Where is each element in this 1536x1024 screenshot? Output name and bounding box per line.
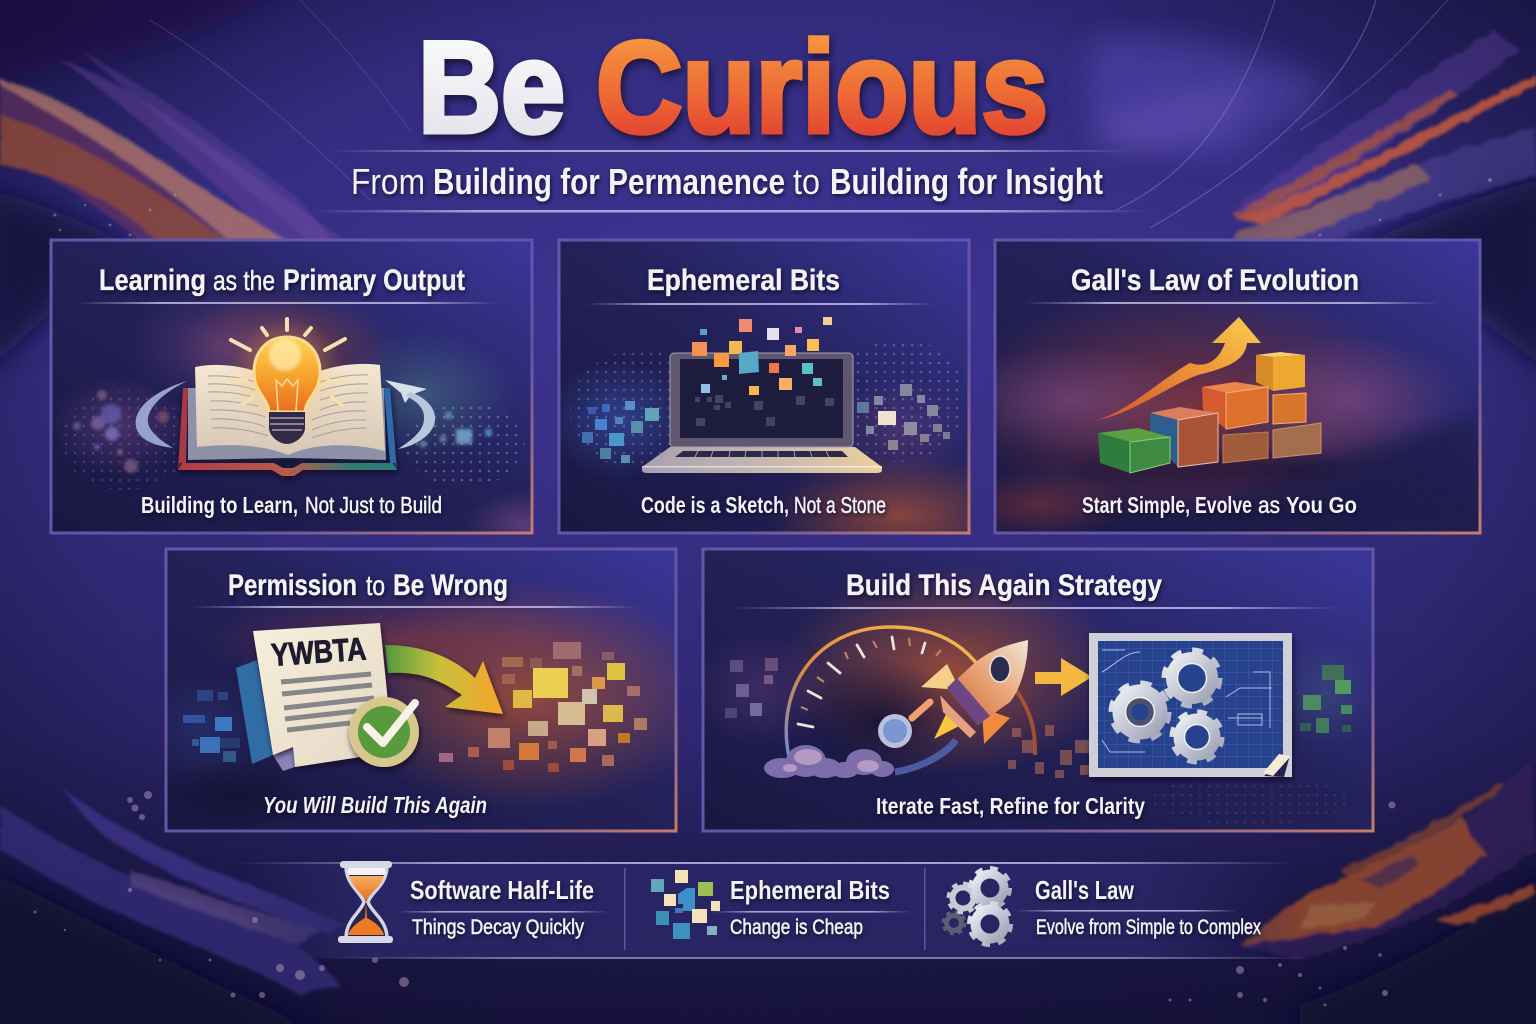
caption: You Go — [1286, 492, 1357, 518]
footer strip — [235, 861, 1320, 959]
icon: speedometer with rocket — [764, 627, 1035, 778]
panel heading — [228, 569, 508, 602]
legend: Software Half-Life: Software Half-Life — [410, 875, 594, 905]
panel heading: Learning — [99, 264, 206, 297]
icon: blueprint with gears — [1089, 633, 1292, 777]
subtitle: From — [351, 161, 425, 202]
panel heading: as the — [213, 265, 275, 296]
subtitle — [310, 150, 1150, 212]
legend: Software Half-Life — [397, 875, 608, 939]
panel: Gall's Law of Evolution — [950, 240, 1480, 540]
title: Be Curious: Be — [418, 14, 565, 160]
icon: growing blocks with arrow — [1075, 317, 1335, 482]
panel: Ephemeral Bits — [558, 238, 970, 534]
title: Be Curious — [418, 14, 1048, 160]
caption: Building to Learn, — [141, 492, 298, 518]
panel heading: to — [366, 570, 385, 601]
legend: Gall's Law: Evolve from Simple to Complex — [1036, 916, 1261, 939]
caption — [141, 492, 442, 518]
title: Be Curious: Curious — [596, 14, 1048, 160]
legend: Ephemeral Bits: Ephemeral Bits — [730, 875, 890, 905]
icon: gears — [944, 869, 1010, 944]
icon: side bits — [725, 658, 1352, 778]
icon: laptop with dissolving squares — [582, 317, 950, 473]
caption: Code is a Sketch, — [641, 492, 789, 518]
panel: Build This Again Strategy — [690, 549, 1375, 831]
caption: Not a Stone — [794, 492, 886, 518]
subtitle: Building for Permanence — [433, 161, 785, 202]
panel: Learning as the Primary Output — [50, 238, 534, 534]
icon: hourglass — [338, 861, 393, 943]
icon: YWBTA document with check badge: YWBTA — [270, 630, 367, 673]
panel heading: Build This Again Strategy — [846, 569, 1162, 602]
legend: Gall's Law: Gall's Law — [1035, 875, 1135, 905]
icon: book, bulb and cycle arrows — [136, 317, 435, 476]
icon: transformed bits — [439, 642, 647, 772]
legend: Ephemeral Bits: Change is Cheap — [730, 916, 863, 939]
legend: Ephemeral Bits — [712, 875, 911, 939]
panel heading: Primary Output — [283, 264, 465, 297]
panel heading — [99, 264, 465, 297]
arrow: yellow right — [1035, 658, 1092, 696]
panel heading: Permission — [228, 569, 357, 602]
legend: Gall's Law — [1015, 875, 1261, 939]
caption: as — [1258, 492, 1280, 518]
icon: ephemeral squares — [651, 870, 720, 939]
subtitle: to — [793, 161, 820, 202]
legend: Software Half-Life: Things Decay Quickly — [412, 916, 584, 939]
panel heading: Be Wrong — [393, 569, 508, 602]
arrow: green to yellow — [385, 645, 503, 714]
panel: Permission to Be Wrong — [164, 548, 678, 832]
caption: Iterate Fast, Refine for Clarity — [876, 793, 1145, 819]
caption: Not Just to Build — [305, 492, 442, 518]
panel heading: Ephemeral Bits — [647, 264, 840, 297]
icon: blue bits — [183, 690, 240, 762]
subtitle: Building for Insight — [830, 161, 1103, 202]
icon: YWBTA document with check badge — [236, 623, 419, 771]
panel heading: Gall's Law of Evolution — [1071, 264, 1359, 297]
caption: You Will Build This Again — [263, 792, 487, 818]
caption: Start Simple, Evolve — [1082, 492, 1252, 518]
